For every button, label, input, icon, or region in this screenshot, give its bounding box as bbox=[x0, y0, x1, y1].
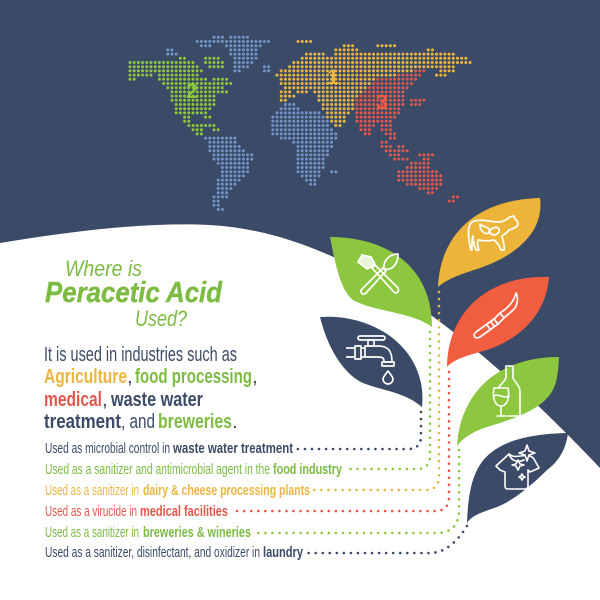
map number 1: 1 bbox=[327, 66, 339, 89]
icon: water tap bbox=[346, 336, 394, 384]
use: medical: Used as a virucide in bbox=[45, 504, 137, 520]
leaf: food bbox=[330, 237, 432, 327]
intro text: Agriculture bbox=[44, 365, 127, 388]
region: Greenland, Arctic, South America and Africa bbox=[168, 37, 336, 209]
use: waste water: waste water treatment bbox=[172, 441, 293, 457]
use: food industry: food industry bbox=[273, 462, 342, 478]
leaf: medical bbox=[447, 277, 549, 367]
title: Peracetic Acid bbox=[45, 277, 223, 309]
use: laundry: laundry bbox=[263, 545, 303, 561]
icon: fork and spoon bbox=[358, 254, 399, 294]
intro text: , bbox=[252, 365, 258, 388]
dotted connectors bbox=[233, 292, 467, 553]
icon: wine bottle and glass bbox=[493, 366, 520, 416]
intro text: food processing bbox=[135, 365, 252, 388]
region: Eurasia bbox=[273, 37, 470, 130]
map number 3: 3 bbox=[376, 91, 388, 114]
title bbox=[45, 256, 223, 331]
use: dairy: Used as a sanitizer in bbox=[45, 483, 139, 499]
region: Asia and Oceania bbox=[357, 71, 462, 201]
use: medical: medical facilities bbox=[140, 504, 228, 520]
use: dairy bbox=[45, 483, 310, 499]
title: Used? bbox=[135, 306, 188, 331]
intro text bbox=[44, 343, 258, 433]
intro text: , bbox=[102, 388, 108, 411]
dotted world map bbox=[130, 37, 470, 209]
intro text: medical bbox=[44, 388, 102, 411]
use: waste water: Used as microbial control in bbox=[45, 441, 170, 457]
region: North America bbox=[130, 54, 231, 134]
intro text: treatment bbox=[44, 410, 121, 433]
intro text: . bbox=[232, 410, 238, 433]
icon: cow bbox=[468, 216, 518, 250]
use: dairy: dairy & cheese processing plants bbox=[143, 483, 310, 499]
intro text: , bbox=[127, 365, 133, 388]
use: breweries bbox=[45, 525, 251, 541]
leaf: laundry bbox=[467, 433, 568, 523]
icon: scalpel bbox=[474, 293, 517, 338]
intro text: breweries bbox=[158, 410, 232, 433]
leaf: breweries bbox=[457, 357, 559, 446]
icon: shirt with sparkles bbox=[496, 445, 539, 489]
white curved panel bbox=[0, 224, 600, 600]
use list bbox=[45, 441, 342, 561]
intro text: , and bbox=[121, 410, 155, 433]
title: Where is bbox=[65, 256, 142, 281]
leaf: water bbox=[320, 317, 422, 407]
map number 2: 2 bbox=[186, 80, 198, 103]
use: breweries: breweries & wineries bbox=[143, 525, 251, 541]
intro text: It is used in industries such as bbox=[44, 343, 237, 366]
intro text: waste water bbox=[110, 388, 203, 411]
use: food industry: Used as a sanitizer and antimicrobial agent in the bbox=[45, 462, 270, 478]
use: breweries: Used as a sanitizer in bbox=[45, 525, 139, 541]
leaf: dairy bbox=[438, 198, 540, 287]
use: laundry: Used as a sanitizer, disinfectant, and oxidizer in bbox=[45, 545, 260, 561]
